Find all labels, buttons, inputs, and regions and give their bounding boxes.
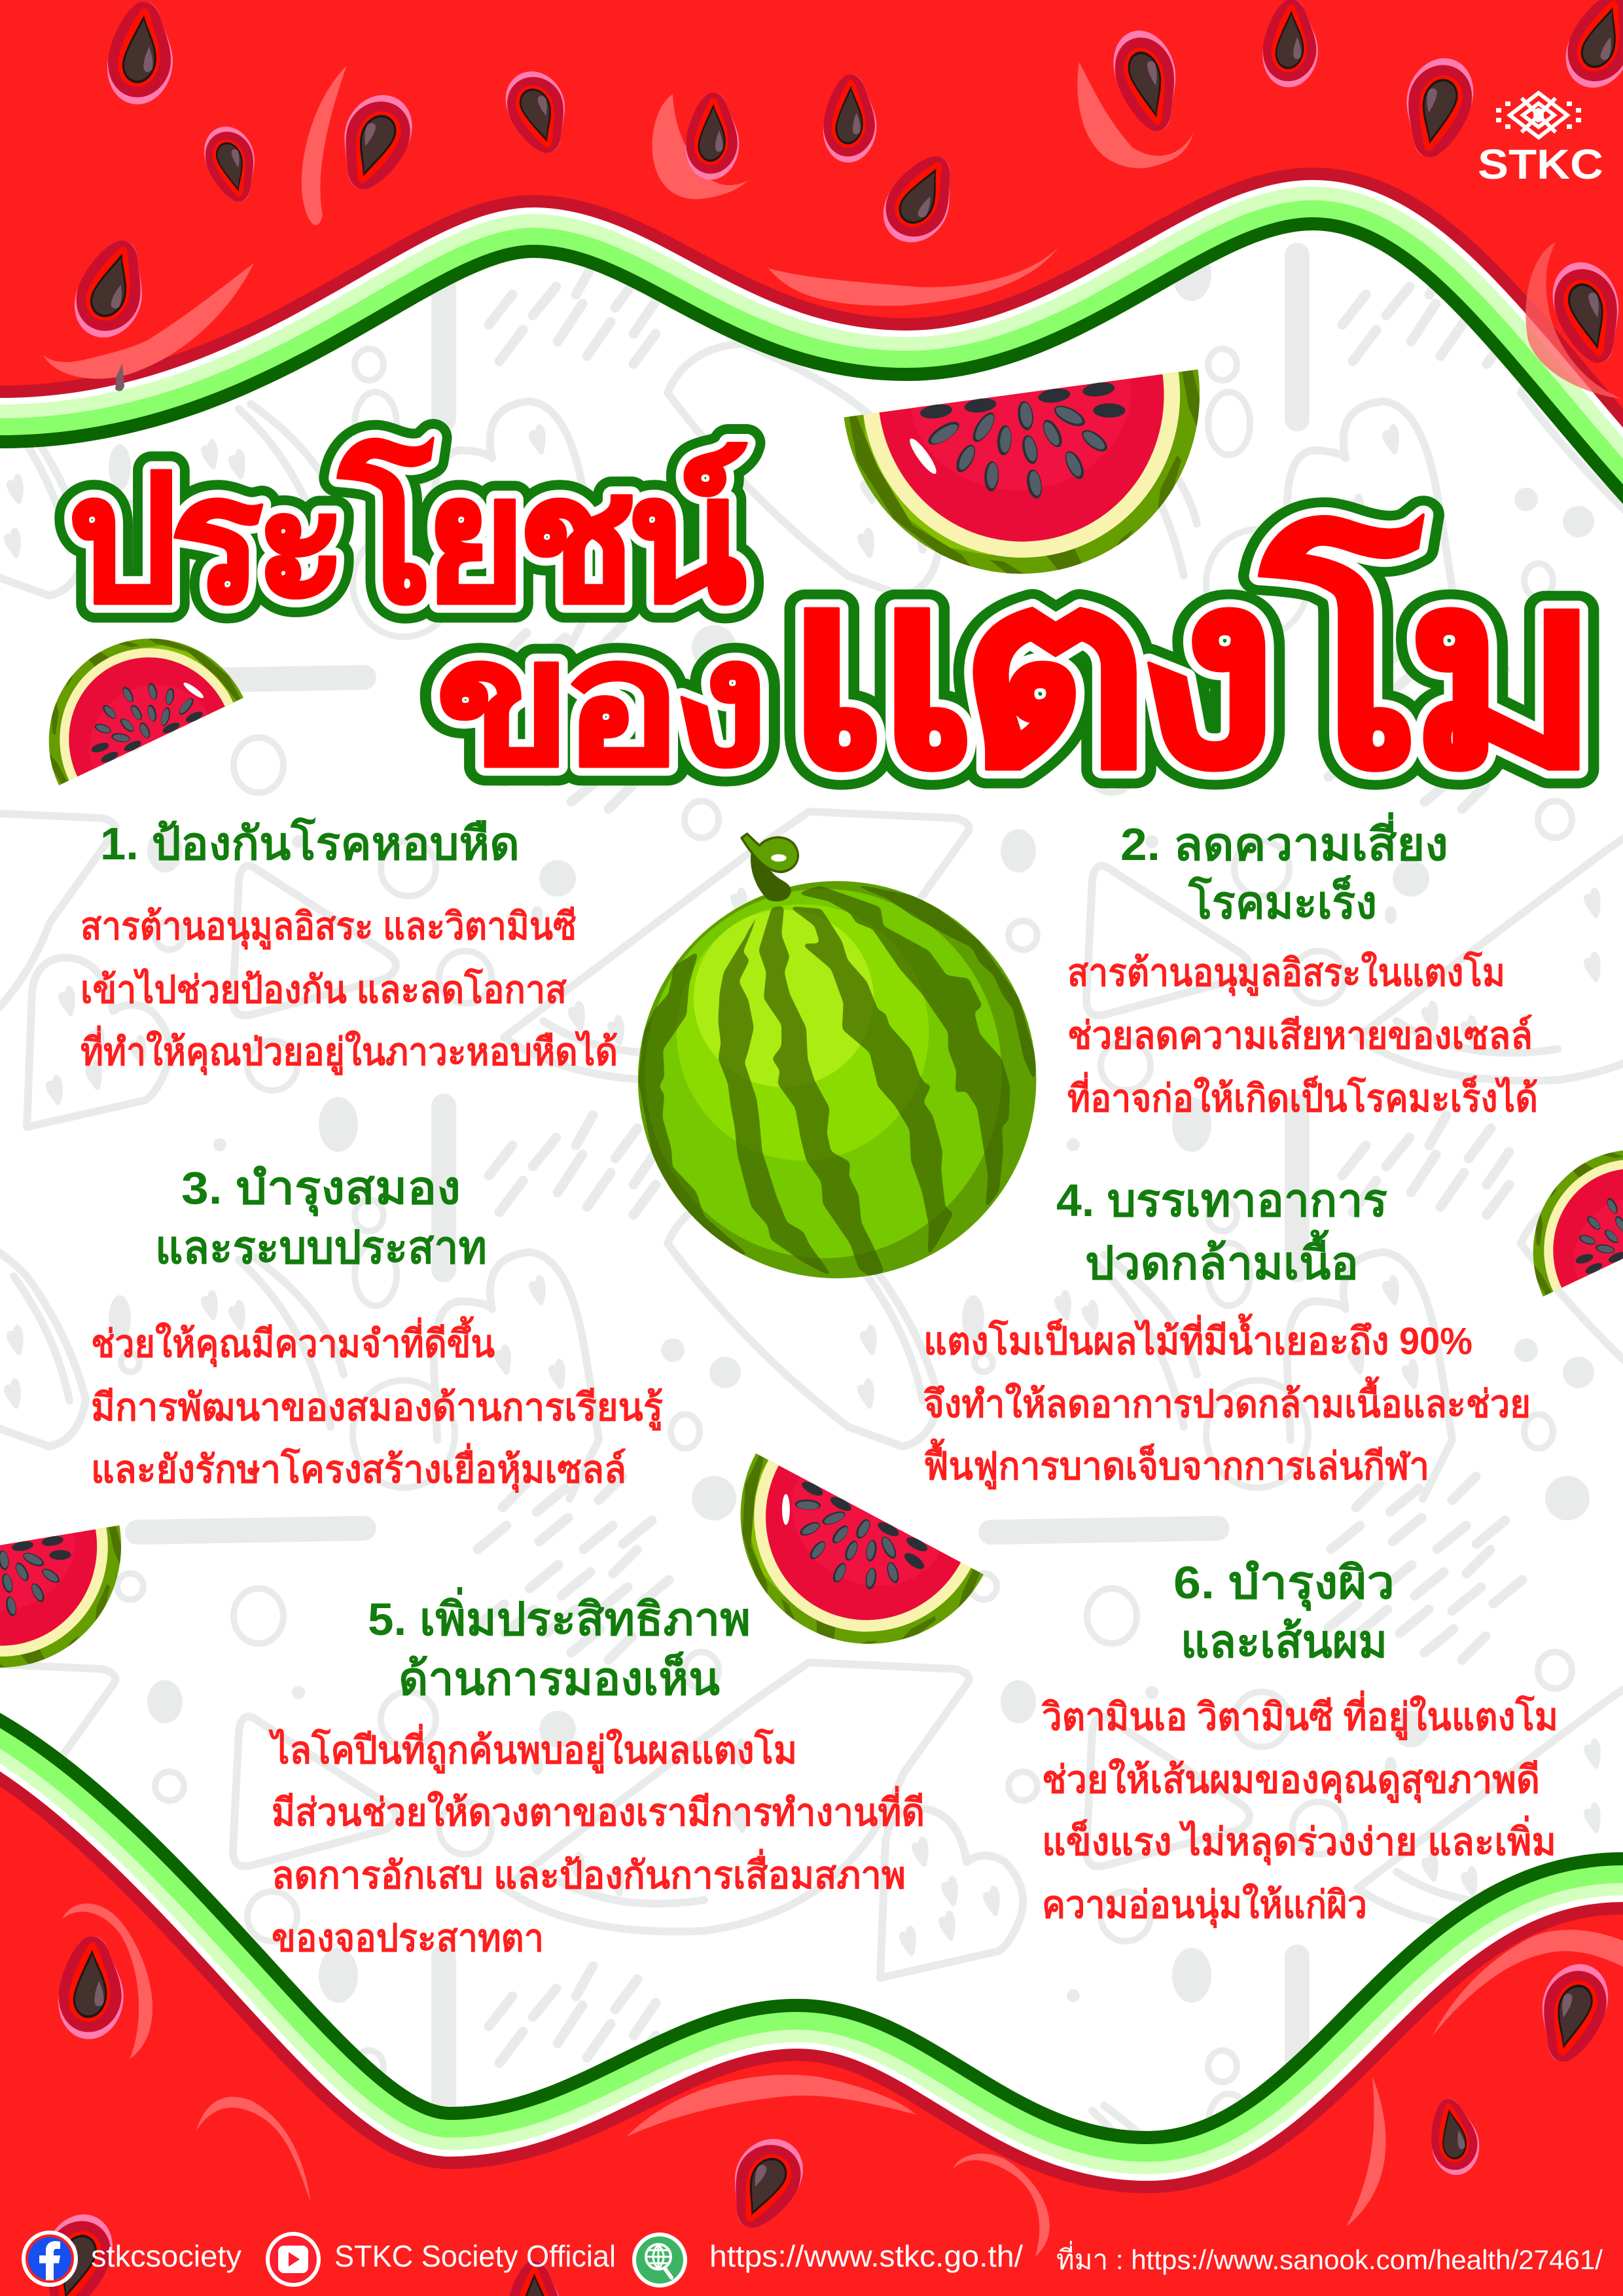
body 5: ของจอประสาทตา [272,1917,544,1960]
title line 2 small: ของ [435,605,759,802]
title line 2 large: แตงโม [782,511,1584,823]
body 2: ที่อาจก่อให้เกิดเป็นโรคมะเร็งได้ [1067,1071,1538,1120]
watermelon slice top [844,369,1222,598]
heading 1: 1. ป้องกันโรคหอบหืด [100,817,520,869]
section 2 [1067,812,1538,1120]
heading 4 [1056,1175,1387,1289]
heading 6 [1173,1557,1395,1667]
logo emblem [1499,93,1578,137]
heading 4: 4. บรรเทาอาการ [1056,1175,1387,1226]
watermelon slice right edge [1499,1115,1623,1297]
top watermelon wave [0,0,1623,504]
body 2: สารต้านอนุมูลอิสระในแตงโม [1067,950,1505,997]
heading 5: ด้านการมองเห็น [399,1651,720,1704]
section 6 [1041,1557,1558,1929]
bottom flesh highlights [62,1903,1623,2257]
heading 2: โรคมะเร็ง [1188,874,1377,928]
whole watermelon [638,834,1036,1278]
stem [741,834,798,901]
heading 6: และเส้นผม [1181,1616,1387,1667]
body 1: ที่ทำให้คุณป่วยอยู่ในภาวะหอบหืดได้ [80,1025,618,1076]
body 5: มีส่วนช่วยให้ดวงตาของเรามีการทำงานที่ดี [272,1785,925,1834]
bottom watermelon wave [0,1713,1623,2296]
body 3: มีการพัฒนาของสมองด้านการเรียนรู้ [91,1386,663,1431]
website url: https://www.stkc.go.th/ [709,2239,1023,2273]
icon: website [634,2234,685,2286]
heading 4: ปวดกล้ามเนื้อ [1085,1229,1359,1289]
section 3 [91,1162,663,1494]
title line 1: ประโยชน์ [67,435,749,639]
title line 2 large: แตงโม [782,511,1584,823]
body 1: เข้าไปช่วยป้องกัน และลดโอกาส [80,967,567,1011]
body 5 [268,1723,925,1960]
source: ที่มา : https://www.sanook.com/health/27461/ [1056,2241,1603,2275]
body 6: ความอ่อนนุ่มให้แก่ผิว [1042,1882,1367,1929]
top seeds [68,0,1623,369]
body 4: ฟื้นฟูการบาดเจ็บจากการเล่นกีฬา [923,1439,1429,1490]
icon: facebook [24,2233,76,2285]
watermelon slice left [14,603,243,785]
heading 2: 2. ลดความเสี่ยง [1120,812,1448,870]
body 5: ไลโคปีนที่ถูกค้นพบอยู่ในผลแตงโม [268,1723,797,1774]
body 2 [1067,950,1538,1120]
facebook name: stkcsociety [91,2239,241,2273]
body 2: ช่วยลดความเสียหายของเซลล์ [1067,1014,1533,1057]
section 5 [268,1587,925,1960]
heading 5: 5. เพิ่มประสิทธิภาพ [368,1587,751,1645]
footer [24,2233,1603,2286]
heading 2 [1120,812,1448,928]
watermelon slice center [694,1453,984,1691]
top flesh highlights [43,62,1623,399]
heading 3: 3. บำรุงสมอง [181,1162,461,1217]
STKC logo [1478,93,1603,188]
watermelon slice bottom left [0,1525,140,1687]
icon: youtube [268,2234,319,2285]
heading 5 [368,1587,751,1704]
body 6: วิตามินเอ วิตามินซี ที่อยู่ในแตงโม [1041,1690,1558,1740]
body 3: และยังรักษาโครงสร้างเยื่อหุ้มเซลล์ [91,1443,626,1494]
body 5: ลดการอักเสบ และป้องกันการเสื่อมสภาพ [272,1848,906,1897]
title [67,435,1584,823]
title line 2 small: ของ [435,605,759,802]
body 1: สารต้านอนุมูลอิสระ และวิตามินซี [80,905,577,950]
body 6: ช่วยให้เส้นผมของคุณดูสุขภาพดี [1042,1757,1540,1804]
title line 2 large: แตงโม [782,511,1584,823]
body 1 [80,905,618,1076]
section 4 [923,1175,1531,1490]
heading 3 [155,1162,487,1273]
bottom seeds [33,1935,1613,2296]
body 4: แตงโมเป็นผลไม้ที่มีน้ำเยอะถึง 90% [923,1314,1472,1363]
body 3: ช่วยให้คุณมีความจำที่ดีขึ้น [91,1316,495,1368]
body 4 [923,1314,1531,1490]
title line 1: ประโยชน์ [67,435,749,639]
title line 2 small: ของ [435,605,759,802]
body 6: แข็งแรง ไม่หลุดร่วงง่าย และเพิ่ม [1042,1815,1556,1866]
body 6 [1041,1690,1558,1929]
body 4: จึงทำให้ลดอาการปวดกล้ามเนื้อและช่วย [923,1376,1531,1426]
body 3 [91,1316,663,1494]
section 1 [80,817,618,1076]
STKC logo: STKC [1478,141,1603,188]
heading 6: 6. บำรุงผิว [1173,1557,1395,1611]
title line 1: ประโยชน์ [67,435,749,639]
heading 3: และระบบประสาท [155,1222,487,1273]
youtube name: STKC Society Official [334,2239,616,2273]
